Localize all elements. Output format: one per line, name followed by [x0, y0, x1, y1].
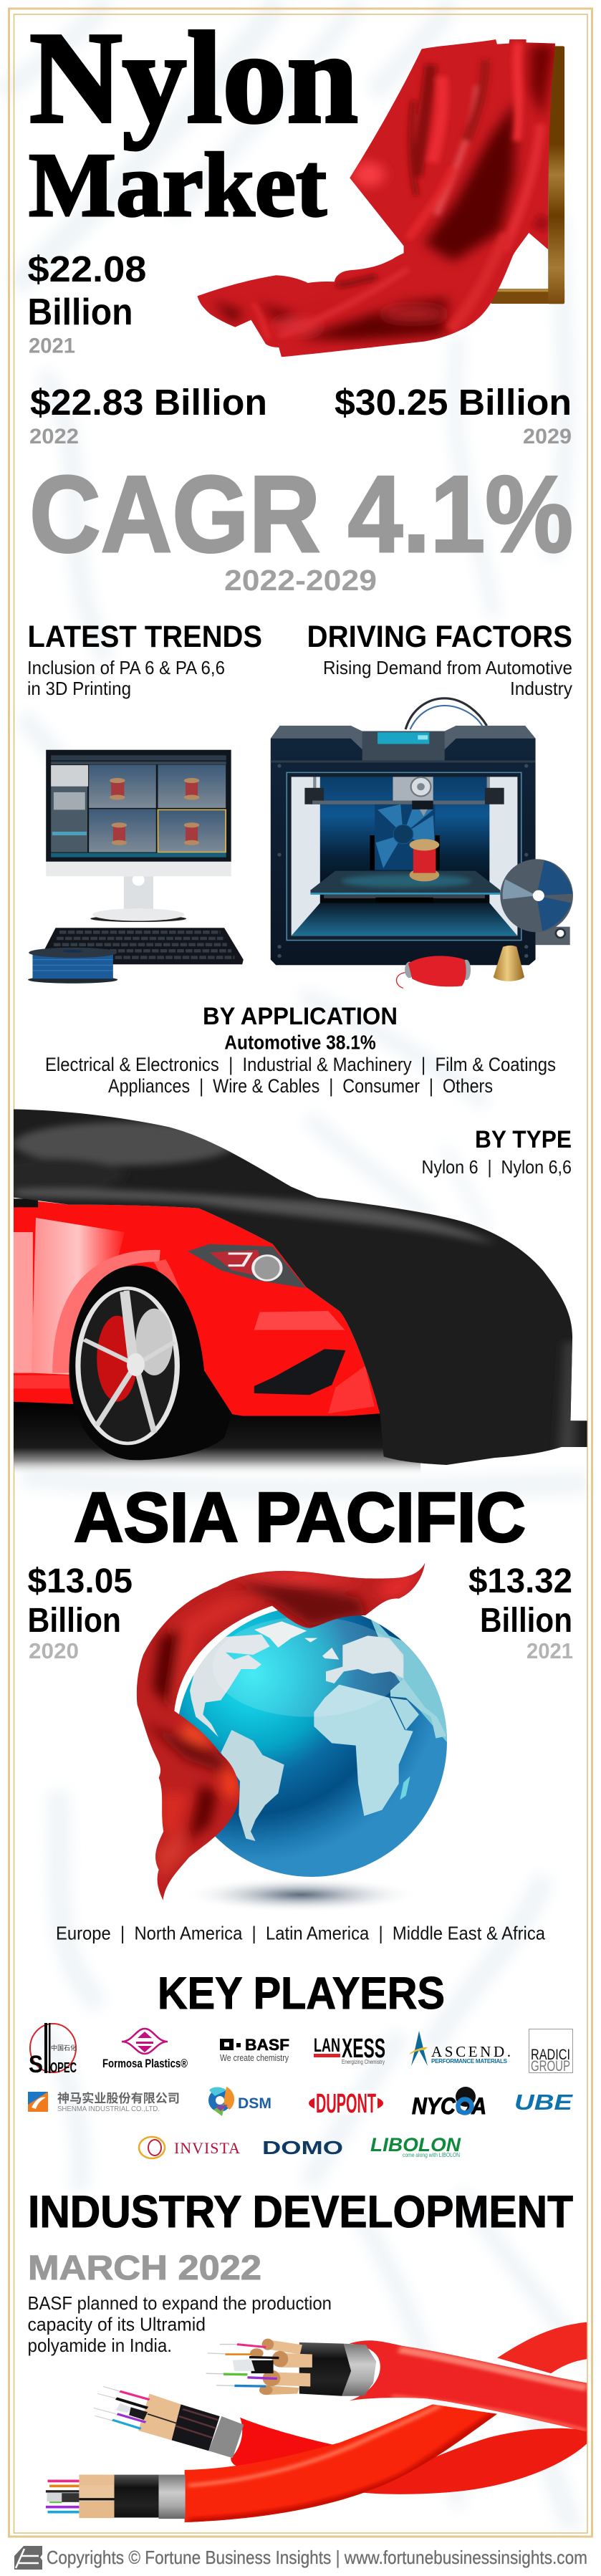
- logo: Sinopec: S: [29, 2051, 43, 2078]
- logo: Libolon: LIBOLON: [370, 2134, 461, 2156]
- stat: Asia Pacific 2020: 2020: [29, 1638, 79, 1663]
- icon: 3D printer: [271, 698, 536, 965]
- logo: Sinopec: OPEC: [50, 2060, 77, 2076]
- logo: Shenma: 神马实业股份有限公司: [57, 2088, 180, 2106]
- text block: BASF development: [27, 2292, 332, 2356]
- logo: DuPont: [309, 2089, 383, 2119]
- footer logo: [14, 2546, 42, 2570]
- title: [29, 5, 358, 236]
- stat: 2021 market value: Billion: [27, 292, 133, 333]
- logo: Formosa Plastics: Formosa Plastics®: [102, 2057, 188, 2070]
- logo: DOMO: DOMO: [262, 2137, 343, 2158]
- cable: top strand: [206, 2339, 587, 2432]
- panel: by application: Automotive 38.1%: [224, 1032, 376, 1053]
- stat: 2021 market value: $22.08: [27, 249, 146, 289]
- logo: Shenma: SHENMA INDUSTRIAL CO.,LTD.: [57, 2105, 160, 2113]
- logo: Libolon: come along with LIBOLON: [403, 2151, 460, 2158]
- logo: Ascend: PERFORMANCE MATERIALS: [431, 2058, 508, 2065]
- continent: North America: [190, 1635, 270, 1737]
- icon: wheel: [69, 1266, 232, 1460]
- ground shadow: [14, 1402, 420, 1476]
- footer white band: [0, 2539, 601, 2576]
- icon: monitor: [46, 750, 231, 922]
- logo: Invista: [139, 2137, 240, 2158]
- continent: Europe: [326, 1635, 403, 1683]
- continent: Greenland: [254, 1621, 307, 1648]
- logo: Ascend: [409, 2031, 511, 2066]
- black cover: [0, 1103, 591, 1476]
- logo: Radici Group: [529, 2029, 573, 2075]
- CAGR figure: 2022-2029: [224, 564, 377, 597]
- stat: Asia Pacific 2021: Billion: [480, 1602, 572, 1640]
- illustration: 3D printing desk: [28, 698, 573, 988]
- stat: Asia Pacific 2020: Billion: [27, 1602, 121, 1640]
- gold picture frame: [491, 46, 564, 304]
- globe shadow: [181, 1877, 420, 1913]
- panel: by application: Appliances | Wire & Cables | Consumer | Others: [108, 1075, 493, 1097]
- logo: Sinopec: [29, 2023, 77, 2078]
- panel: by application: [45, 1003, 556, 1097]
- stat: Asia Pacific 2020: $13.05: [27, 1562, 133, 1600]
- text block: BASF development: capacity of its Ultramid: [27, 2314, 206, 2335]
- illustration: globe wrapped in red cape: [129, 1554, 448, 1913]
- icon: dark filament reel: [500, 859, 573, 945]
- stat: 2022 market value: $22.83 Billion: [30, 382, 267, 423]
- text block: BASF development: BASF planned to expand the production: [27, 2292, 332, 2314]
- panel: by application: BY APPLICATION: [203, 1003, 398, 1030]
- illustration: red car under black cover: [0, 1103, 591, 1476]
- logo: Lanxess: XESS: [342, 2034, 385, 2064]
- continent: Africa: [314, 1685, 413, 1816]
- stat: 2021 market value: [27, 249, 146, 358]
- panel: latest trends: Inclusion of PA 6 & PA 6,6: [27, 657, 225, 678]
- icon: red thread spool: [396, 956, 471, 988]
- panel: driving factors: [307, 620, 572, 699]
- panel: driving factors: DRIVING FACTORS: [307, 620, 572, 654]
- logo: Lanxess: Energizing Chemistry: [342, 2059, 385, 2065]
- illustration: red cables: [46, 2322, 587, 2522]
- stat: Asia Pacific 2021: $13.32: [468, 1562, 572, 1600]
- illustration: red cloth on golden frame: [198, 39, 564, 357]
- icon: gold thimble: [494, 946, 524, 981]
- text block: BASF development: polyamide in India.: [27, 2335, 172, 2356]
- panel: latest trends: [27, 620, 262, 699]
- panel: by type: Nylon 6 | Nylon 6,6: [421, 1156, 572, 1178]
- logo: Lanxess: LAN: [314, 2034, 340, 2056]
- globe: [176, 1606, 448, 1877]
- list: other regions: Europe | North America | Latin America | Middle East & Africa: [56, 1923, 545, 1944]
- panel: by application: Electrical & Electronics | Industrial & Machinery | Film & Coatings: [45, 1054, 556, 1075]
- logo: Invista: INVISTA: [174, 2139, 240, 2157]
- icon: blue filament spool: [28, 948, 117, 984]
- logo: DuPont: DUPONT: [316, 2089, 376, 2119]
- cable: rear strand: [497, 2322, 587, 2373]
- stat: Asia Pacific 2021: 2021: [527, 1638, 573, 1663]
- logo: DSM: [208, 2087, 271, 2116]
- red cape: [129, 1554, 439, 1903]
- stat: 2022 market value: [29, 382, 267, 448]
- stat: 2029 market value: [335, 382, 572, 448]
- title line: Nylon: Nylon: [29, 5, 358, 150]
- red car body: [14, 1198, 380, 1416]
- stat: 2029 market value: $30.25 Billion: [335, 382, 572, 423]
- stat: Asia Pacific 2020: [27, 1562, 133, 1663]
- logo: Sinopec: 中国石化: [51, 2043, 77, 2052]
- cable: lower right strand: [362, 2428, 587, 2494]
- stat: Asia Pacific 2021: [468, 1562, 573, 1663]
- heading: key players: KEY PLAYERS: [158, 1969, 445, 2019]
- continent: South America: [221, 1730, 284, 1841]
- logo: UBE: UBE: [514, 2090, 574, 2115]
- icon: keyboard: [39, 928, 244, 964]
- logo: Lanxess: [314, 2034, 385, 2065]
- logo: Radici Group: RADICI: [531, 2047, 570, 2063]
- cable: middle sheath: [94, 2386, 340, 2468]
- logo: Radici Group: GROUP: [531, 2058, 570, 2075]
- subheading: March 2022: MARCH 2022: [28, 2249, 261, 2287]
- stat: 2029 market value: 2029: [523, 425, 572, 448]
- logo: Nycoa: NYCOA: [412, 2093, 486, 2119]
- red cloth: [198, 39, 556, 357]
- logo: Ascend: ASCEND.: [431, 2043, 511, 2060]
- icon: headlight: [188, 1244, 306, 1288]
- title line: Market: Market: [29, 134, 327, 236]
- cable: front strand: [46, 2404, 497, 2522]
- logo: BASF: We create chemistry: [220, 2053, 289, 2063]
- red roof sliver: [293, 1189, 319, 1198]
- logo: Formosa Plastics: [102, 2029, 188, 2070]
- panel: driving factors: Industry: [510, 678, 572, 699]
- stat: 2021 market value: 2021: [29, 334, 75, 358]
- heading: Asia Pacific: ASIA PACIFIC: [74, 1478, 526, 1557]
- panel: by type: [421, 1126, 572, 1178]
- panel: latest trends: in 3D Printing: [27, 678, 131, 699]
- logo: BASF: BASF: [245, 2036, 289, 2054]
- logo: DSM: DSM: [238, 2095, 271, 2112]
- continent: Asia: [390, 1678, 446, 1739]
- logo: BASF: [220, 2036, 289, 2063]
- logo: Shenma: [28, 2088, 180, 2113]
- panel: latest trends: LATEST TRENDS: [27, 620, 262, 654]
- panel: driving factors: Rising Demand from Automotive: [323, 657, 572, 678]
- panel: by type: BY TYPE: [475, 1126, 572, 1153]
- stat: 2022 market value: 2022: [29, 425, 79, 448]
- heading: industry development: INDUSTRY DEVELOPMENT: [28, 2187, 573, 2237]
